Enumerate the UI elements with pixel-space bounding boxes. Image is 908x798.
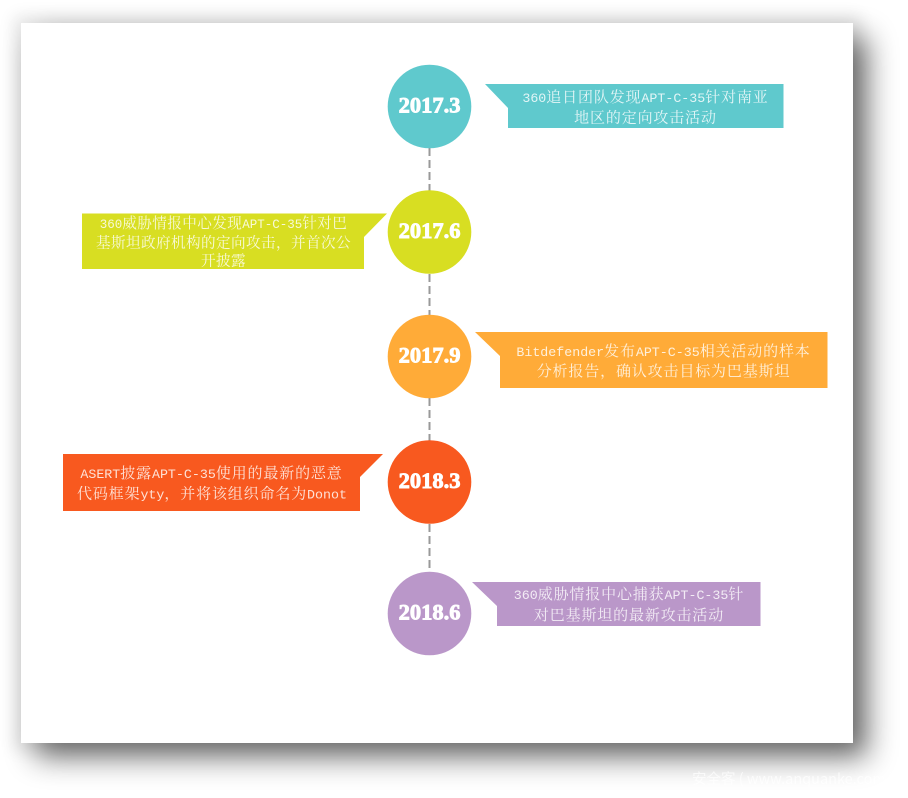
milestone: 2018.3: 2018.3 [399, 468, 460, 493]
callout: 2017.6: 开披露 [201, 250, 246, 270]
callout: 2017.6: 360威胁情报中心发现APT-C-35针对巴 [100, 212, 347, 233]
watermark: 安全客 ( www.anquanke.com ) [692, 768, 894, 789]
callout: 2017.3: 360追日团队发现APT-C-35针对南亚 [522, 86, 769, 107]
milestone: 2017.6: 2017.6 [399, 218, 460, 243]
milestone: 2018.3 [388, 440, 471, 524]
callout: 2017.6: 基斯坦政府机构的定向攻击，并首次公 [96, 232, 351, 252]
callout: 2018.3: ASERT披露APT-C-35使用的最新的恶意 [80, 462, 343, 483]
callout: 2018.3 [63, 454, 383, 511]
callout: 2018.6: 360威胁情报中心捕获APT-C-35针 [514, 583, 744, 604]
callout: 2017.9: Bitdefender发布APT-C-35相关活动的样本 [516, 340, 811, 361]
milestone: 2017.3 [388, 65, 471, 148]
dashed timeline connector [428, 148, 430, 572]
callout: 2017.3: 地区的定向攻击活动 [574, 106, 717, 128]
callout: 2017.9: 分析报告，确认攻击目标为巴基斯坦 [537, 360, 790, 381]
callout: 2018.3: 代码框架yty，并将该组织命名为Donot [77, 482, 347, 504]
milestone: 2018.6: 2018.6 [399, 600, 460, 624]
callout: 2018.6: 对巴基斯坦的最新攻击活动 [534, 604, 724, 625]
milestone: 2017.9 [388, 315, 471, 398]
callout: 2017.6 [82, 212, 387, 270]
milestone: 2017.3: 2017.3 [399, 92, 460, 118]
callout: 2017.9 [475, 332, 828, 388]
milestone: 2017.9: 2017.9 [399, 342, 460, 368]
callout: 2017.3 [485, 84, 784, 128]
milestone: 2018.6 [388, 572, 471, 655]
callout: 2018.6 [472, 582, 760, 626]
milestone: 2017.6 [388, 190, 471, 274]
